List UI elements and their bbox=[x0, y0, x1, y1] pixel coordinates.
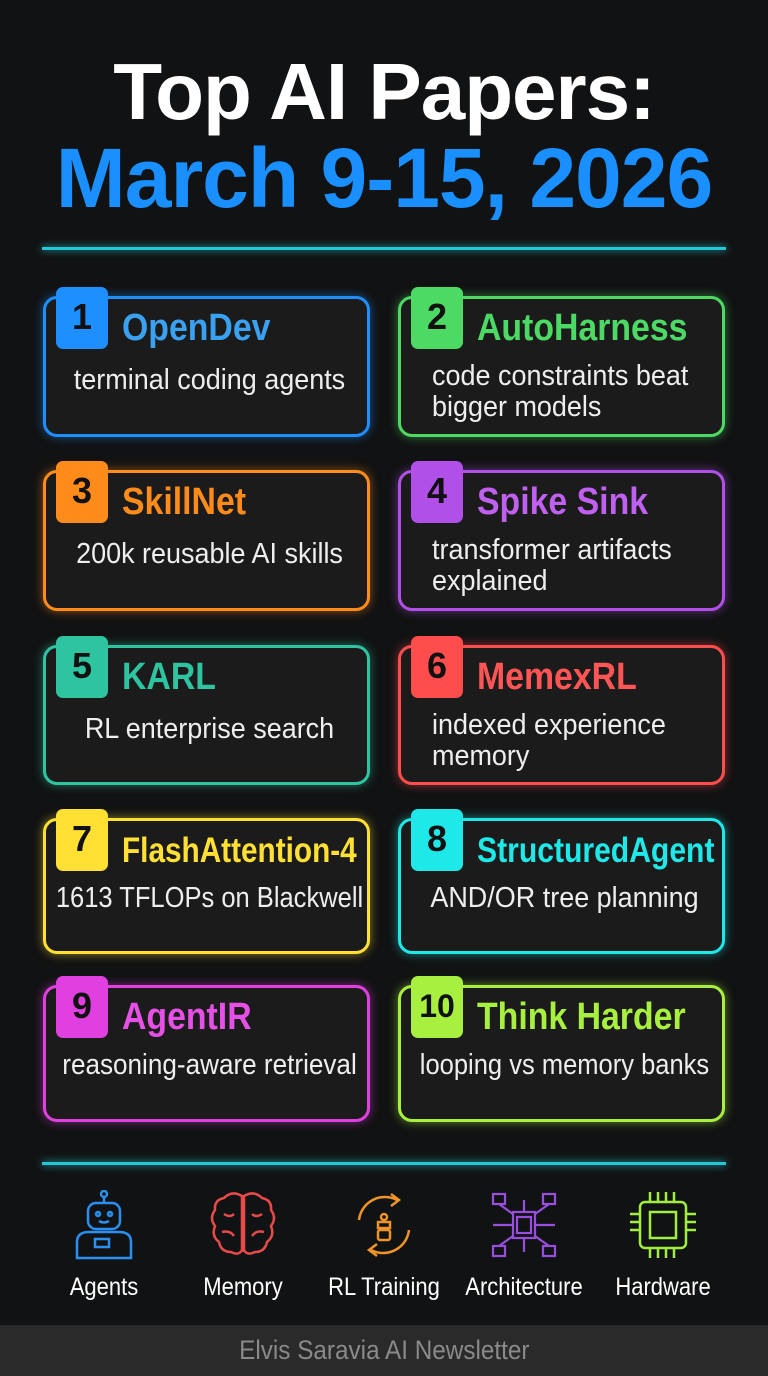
card 2: bigger models bbox=[432, 391, 601, 423]
icon: agents bbox=[70, 1190, 138, 1301]
card 9: AgentIR bbox=[122, 996, 252, 1038]
card 1: 1 bbox=[72, 296, 92, 337]
card 3: SkillNet bbox=[122, 481, 246, 523]
card 2: code constraints beat bbox=[432, 360, 688, 392]
card 6: 6 bbox=[427, 645, 447, 686]
card 6: indexed experience bbox=[432, 709, 666, 741]
card 3: 3 bbox=[72, 470, 92, 511]
card 4: transformer artifacts bbox=[432, 534, 672, 566]
card 6: memory bbox=[432, 740, 529, 772]
card 8: 8 bbox=[427, 818, 447, 859]
icon: hardware bbox=[615, 1192, 711, 1301]
card 7: 7 bbox=[72, 818, 92, 859]
card 8: AND/OR tree planning bbox=[430, 882, 699, 914]
card 5: 5 bbox=[72, 645, 92, 686]
card 6 bbox=[398, 645, 725, 785]
card 10: 10 bbox=[419, 988, 455, 1024]
card 7: FlashAttention-4 bbox=[122, 831, 357, 870]
card 7: 1613 TFLOPs on Blackwell bbox=[56, 882, 363, 914]
icon: architecture: Architecture bbox=[465, 1273, 583, 1301]
card 4: explained bbox=[432, 565, 547, 597]
card 7 bbox=[43, 818, 370, 954]
card 1: OpenDev bbox=[122, 307, 270, 349]
card 2 bbox=[398, 296, 725, 437]
icon: memory: Memory bbox=[203, 1273, 283, 1301]
subtitle date: March 9-15, 2026 bbox=[56, 131, 712, 225]
card 5 bbox=[43, 645, 370, 785]
footer bbox=[0, 1325, 768, 1376]
card 5: RL enterprise search bbox=[85, 713, 334, 745]
card 4: Spike Sink bbox=[477, 481, 648, 523]
card 4 bbox=[398, 470, 725, 611]
card 5: KARL bbox=[122, 656, 216, 698]
card 10 bbox=[398, 985, 725, 1122]
card 9 bbox=[43, 985, 370, 1122]
icon: memory bbox=[203, 1192, 283, 1301]
icon: hardware: Hardware bbox=[615, 1273, 711, 1301]
card 8 bbox=[398, 818, 725, 954]
title: Top AI Papers: bbox=[113, 47, 655, 136]
card 2: 2 bbox=[427, 296, 447, 337]
card 8: StructuredAgent bbox=[477, 831, 714, 870]
card 2: AutoHarness bbox=[477, 307, 687, 349]
card 3 bbox=[43, 470, 370, 611]
icon: architecture bbox=[465, 1192, 583, 1301]
icon: agents: Agents bbox=[70, 1273, 138, 1301]
icon: RL training bbox=[328, 1193, 440, 1301]
card 3: 200k reusable AI skills bbox=[76, 538, 343, 570]
card 10: looping vs memory banks bbox=[420, 1049, 709, 1081]
card 6: MemexRL bbox=[477, 656, 637, 698]
card 4: 4 bbox=[427, 470, 447, 511]
card 9: reasoning-aware retrieval bbox=[62, 1049, 357, 1081]
card 10: Think Harder bbox=[477, 996, 686, 1038]
footer: Elvis Saravia AI Newsletter bbox=[239, 1335, 529, 1365]
card 9: 9 bbox=[72, 985, 92, 1026]
card 1: terminal coding agents bbox=[74, 364, 345, 396]
card 1 bbox=[43, 296, 370, 437]
icon: RL training: RL Training bbox=[328, 1273, 440, 1301]
